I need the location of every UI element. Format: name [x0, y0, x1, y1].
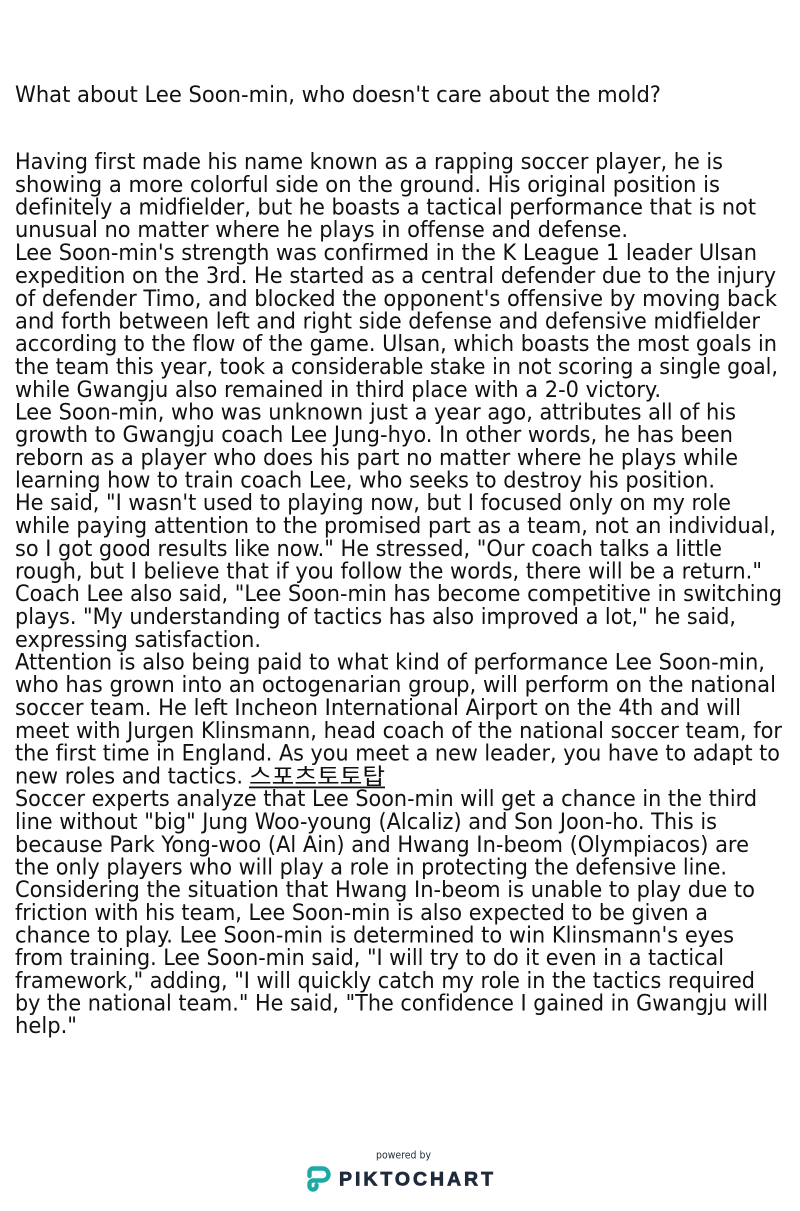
text block: paragraph 6: the only players who will play a role in protecting the defensive line. — [15, 856, 727, 880]
text block: paragraph 1: definitely a midfielder, but he boasts a tactical performance that is not — [15, 196, 756, 220]
text block: paragraph 3: growth to Gwangju coach Lee Jung-hyo. In other words, he has been — [15, 423, 733, 448]
text block: paragraph 4: so I got good results like now." He stressed, "Our coach talks a little — [15, 537, 722, 562]
text block: paragraph 3: reborn as a player who does his part no matter where he plays while — [15, 446, 738, 471]
text block: paragraph 6: help." — [15, 1014, 77, 1039]
text block: paragraph 4 — [15, 491, 782, 653]
text block: paragraph 2: Lee Soon-min's strength was confirmed in the K League 1 leader Ulsan — [15, 241, 757, 266]
text block: paragraph 6: Considering the situation that Hwang In-beom is unable to play due to — [15, 878, 755, 903]
text block: paragraph 6 — [15, 787, 768, 1039]
text block: paragraph 5: who has grown into an octogenarian group, will perform on the national — [15, 673, 776, 698]
text block: paragraph 6: by the national team." He said, "The confidence I gained in Gwangju will — [15, 992, 768, 1016]
text block: paragraph 2: of defender Timo, and blocked the opponent's offensive by moving back — [15, 287, 777, 312]
text block: paragraph 1 — [15, 150, 756, 243]
text block: paragraph 4: expressing satisfaction. — [15, 628, 261, 653]
text block: paragraph 5: Attention is also being paid to what kind of performance Lee Soon-min, — [15, 650, 765, 676]
text block: paragraph 3: learning how to train coach Lee, who seeks to destroy his position. — [15, 468, 715, 494]
text block: paragraph 4: rough, but I believe that if you follow the words, there will be a return." — [15, 560, 762, 584]
text block: paragraph 5: new roles and tactics. — [15, 764, 243, 790]
text block: paragraph 4: plays. "My understanding of tactics has also improved a lot," he said, — [15, 605, 736, 630]
footer: powered by Piktochart — [310, 1150, 493, 1190]
text block: paragraph 5: meet with Jurgen Klinsmann, head coach of the national soccer team, for — [15, 719, 783, 744]
text block: paragraph 2 — [15, 241, 778, 403]
text block: paragraph 6: chance to play. Lee Soon-min is determined to win Klinsmann's eyes — [15, 924, 734, 948]
text block: paragraph 1: showing a more colorful side on the ground. His original position is — [15, 173, 720, 198]
powered by label: powered by — [376, 1150, 431, 1162]
text block: paragraph 1: unusual no matter where he plays in offense and defense. — [15, 218, 628, 243]
icon: Piktochart logo — [310, 1168, 328, 1190]
text block: paragraph 2: expedition on the 3rd. He started as a central defender due to the injury — [15, 264, 776, 289]
text block: paragraph 1: Having first made his name known as a rapping soccer player, he is — [15, 150, 723, 175]
text block: paragraph 6: line without "big" Jung Woo-young (Alcaliz) and Son Joon-ho. This is — [15, 810, 717, 835]
text block: paragraph 6: because Park Yong-woo (Al Ain) and Hwang In-beom (Olympiacos) are — [15, 833, 749, 858]
text block: paragraph 5: soccer team. He left Incheon International Airport on the 4th and will — [15, 696, 741, 721]
heading: What about Lee Soon-min, who doesn't care about the mold? — [15, 83, 661, 108]
text block: paragraph 4: while paying attention to the promised part as a team, not an individual, — [15, 514, 776, 539]
text block: paragraph 3 — [15, 400, 738, 494]
text block: paragraph 6: friction with his team, Lee Soon-min is also expected to be given a — [15, 901, 708, 926]
text block: paragraph 5 — [15, 650, 783, 790]
text block: paragraph 4: Coach Lee also said, "Lee Soon-min has become competitive in switching — [15, 582, 782, 607]
link text: Korean keyword: 스포츠토토탑 — [249, 764, 385, 790]
text block: paragraph 3: Lee Soon-min, who was unknown just a year ago, attributes all of his — [15, 400, 736, 426]
text block: paragraph 4: He said, "I wasn't used to playing now, but I focused only on my role — [15, 491, 731, 516]
text block: paragraph 2: according to the flow of the game. Ulsan, which boasts the most goals in — [15, 332, 777, 357]
text block: paragraph 2: while Gwangju also remained in third place with a 2-0 victory. — [15, 378, 661, 403]
wordmark: PIKTOCHART — [339, 1168, 493, 1190]
text block: paragraph 2: and forth between left and right side defense and defensive midfielder — [15, 310, 761, 334]
text block: paragraph 6: framework," adding, "I will quickly catch my role in the tactics required — [15, 969, 755, 994]
text block: paragraph 6: Soccer experts analyze that Lee Soon-min will get a chance in the third — [15, 787, 757, 812]
text block: paragraph 6: from training. Lee Soon-min said, "I will try to do it even in a tactical — [15, 946, 724, 971]
